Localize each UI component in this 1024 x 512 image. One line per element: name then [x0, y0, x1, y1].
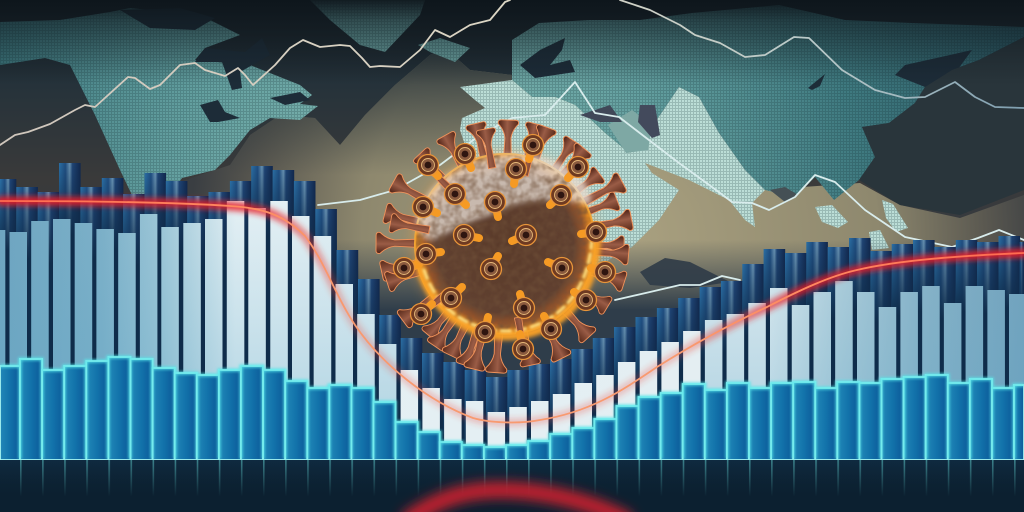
tan lower world region — [0, 48, 1024, 320]
surface spike heads — [394, 134, 616, 360]
chart front blue bars — [0, 357, 1024, 460]
dark lakes and seas — [120, 8, 972, 288]
world map land — [0, 0, 1024, 200]
red trend curve — [0, 201, 1024, 422]
flame rim — [418, 228, 597, 336]
spikes around rim — [376, 120, 634, 373]
chart back bars — [0, 163, 1024, 460]
red curve reflection on floor — [394, 472, 640, 512]
coronavirus — [376, 120, 634, 373]
dark pacific and east asia region — [859, 37, 1024, 215]
tan region upward fade — [230, 48, 512, 200]
floor — [0, 460, 1024, 512]
outer glow halo — [413, 152, 597, 336]
navy fill between bars — [0, 223, 1024, 460]
surface spike stalks — [404, 145, 605, 349]
body texture — [416, 155, 594, 333]
top edge shade — [0, 0, 1024, 85]
light bars lower tint — [0, 201, 1024, 460]
lower shade behind chart — [0, 240, 1024, 310]
upper spikes in front — [389, 127, 543, 357]
sphere body — [414, 153, 596, 335]
central asia tint — [608, 110, 652, 153]
white market lines — [0, 0, 1024, 300]
lower dark backdrop — [0, 309, 1024, 469]
pale middle east and india landmass — [460, 80, 908, 280]
chart light middle bars — [0, 201, 1024, 460]
cyan edge glow on front bars — [0, 357, 1024, 459]
pale highlights — [417, 154, 591, 240]
